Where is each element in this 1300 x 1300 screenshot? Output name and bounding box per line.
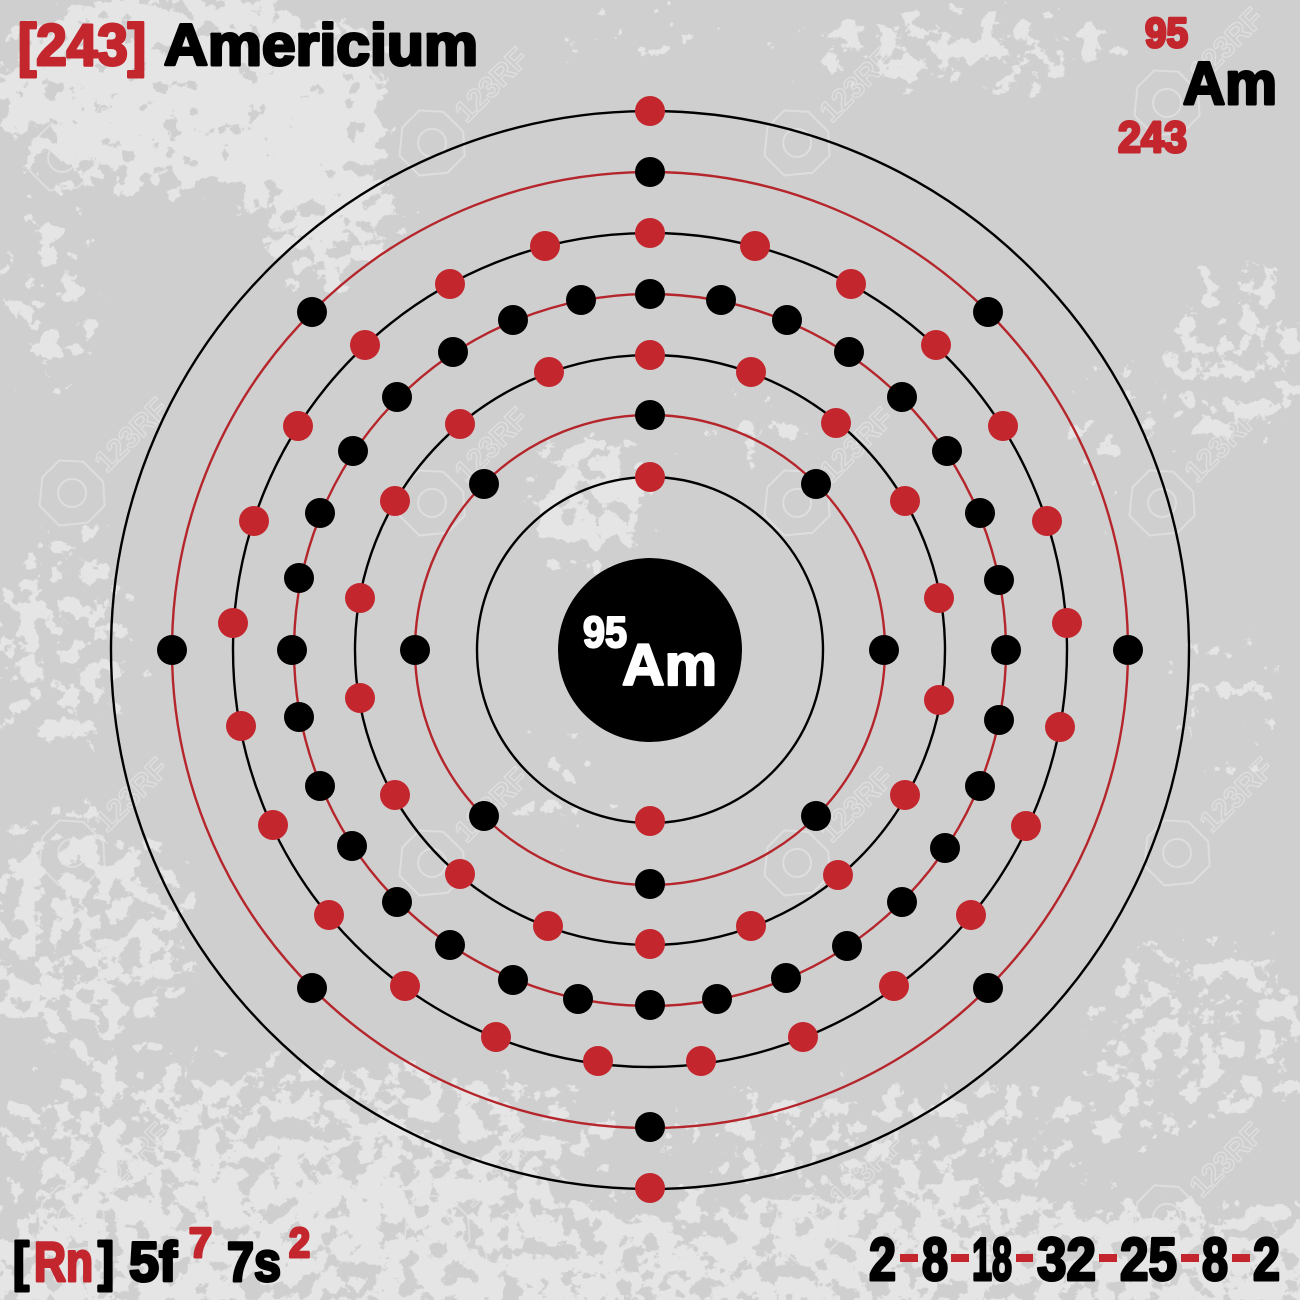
electron configuration: 2 (289, 1219, 310, 1266)
watermarks: 123RF (1178, 402, 1265, 489)
watermarks: 123RF (88, 752, 175, 839)
orbit rings (111, 111, 1189, 1189)
shell 7 electrons: 2 (635, 96, 665, 1203)
symbol: Am (1183, 50, 1277, 117)
shell counts: 2 (869, 1226, 896, 1293)
nucleus atomic number: 95 (583, 608, 627, 657)
shell 2 electrons: 8 (400, 400, 899, 899)
watermarks: 123RF (448, 42, 535, 129)
electron configuration: 7s (227, 1230, 281, 1293)
shell counts: 25 (1120, 1226, 1177, 1293)
element notation top right (1118, 9, 1277, 162)
watermarks: 123RF (1183, 1117, 1270, 1204)
watermarks: 123RF (1183, 2, 1270, 89)
watermarks: 123RF (813, 762, 900, 849)
shell counts: 18 (972, 1226, 1012, 1293)
watermarks: 123RF (88, 392, 175, 479)
nucleus (558, 558, 742, 742)
electron configuration: 5f (129, 1230, 177, 1293)
electron configuration: ] (98, 1232, 114, 1292)
shell counts (869, 1226, 1280, 1293)
shell counts: 2 (1253, 1226, 1280, 1293)
shell 5 electrons: 25 (218, 218, 1082, 1076)
electron configuration: Rn (34, 1230, 93, 1293)
watermarks: 123RF (448, 402, 535, 489)
electron configuration (13, 1219, 310, 1293)
shell 6 electrons: 8 (157, 157, 1143, 1142)
electron configuration: [ (13, 1232, 29, 1292)
watermarks: 123RF (1193, 752, 1280, 839)
atomic mass in brackets: [243] (18, 13, 146, 78)
shell 3 electrons: 18 (345, 340, 954, 959)
title (18, 13, 478, 78)
nucleus symbol: Am (622, 633, 717, 698)
shell counts: 8 (922, 1226, 948, 1293)
watermarks: 123RF (78, 57, 165, 144)
watermarks: 123RF (88, 1117, 175, 1204)
shell counts: 32 (1037, 1226, 1096, 1293)
shell counts: 8 (1202, 1226, 1228, 1293)
watermarks: 123RF (453, 1127, 540, 1214)
shell 4 electrons: 32 (277, 279, 1021, 1020)
atomic number: 95 (1145, 9, 1188, 56)
electron configuration: 7 (189, 1219, 212, 1266)
watermarks: 123RF (823, 1127, 910, 1214)
element name: Americium (164, 13, 478, 78)
watermarks: 123RF (448, 762, 535, 849)
watermarks: 123RF (813, 42, 900, 129)
shell 1 electrons: 2 (635, 462, 665, 836)
watermarks: 123RF (813, 402, 900, 489)
mass number: 243 (1118, 113, 1187, 162)
